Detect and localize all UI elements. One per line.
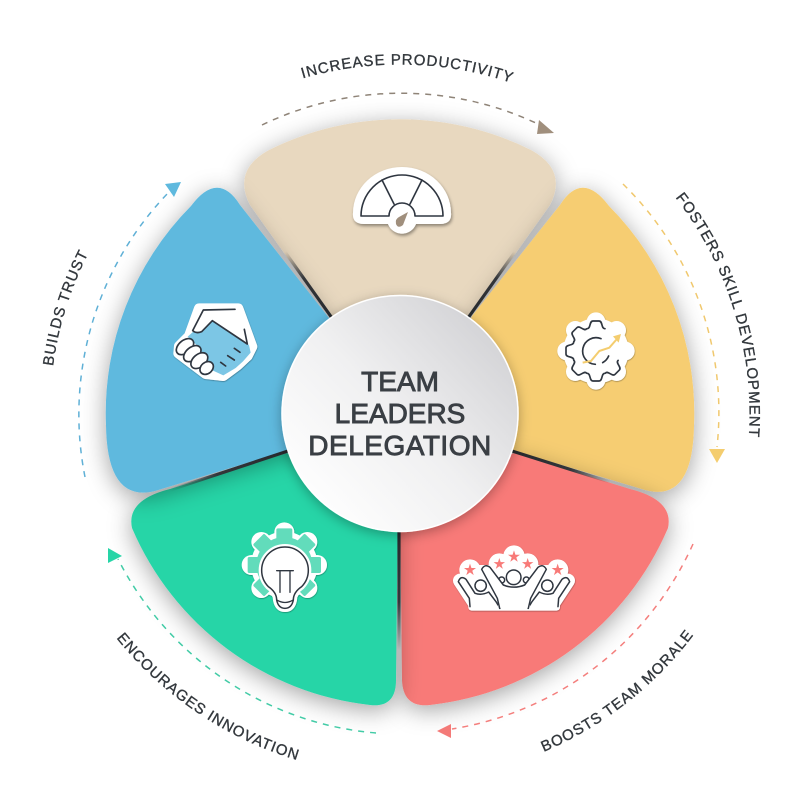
panel: beige segment — [244, 119, 556, 316]
arrow: yellow dashed arc — [623, 184, 725, 463]
label: builds trust: BUILDS TRUST — [42, 249, 87, 366]
centre circle — [282, 296, 518, 532]
icon: lightbulb with gear — [242, 522, 327, 608]
centre title: DELEGATION — [308, 430, 492, 461]
label: boosts team morale: BOOSTS TEAM MORALE — [540, 629, 694, 752]
label: fosters skill development: FOSTERS SKILL DEVELOPMENT — [676, 192, 760, 438]
icon: handshake — [173, 308, 252, 377]
icon: gear with growth arrow — [557, 312, 635, 390]
arrow: blue dashed arc — [79, 182, 181, 477]
arrow: red dashed arc — [437, 544, 693, 738]
panel: blue segment — [106, 188, 360, 493]
panel: yellow segment — [440, 188, 694, 492]
icon: gauge — [353, 167, 451, 234]
arrow: brown dashed arc — [262, 93, 554, 134]
centre title: LEADERS — [335, 398, 465, 429]
icon: cheering team with stars — [458, 545, 570, 611]
panel: green segment — [131, 453, 398, 705]
label: increase productivity: INCREASE PRODUCTIVITY — [301, 54, 514, 82]
centre title: TEAM — [361, 366, 439, 397]
panel: red segment — [400, 453, 669, 705]
arrow: green dashed arc — [108, 548, 376, 733]
label: encourages innovation: ENCOURAGES INNOVATION — [116, 632, 299, 760]
dark separators between segments — [170, 252, 610, 650]
